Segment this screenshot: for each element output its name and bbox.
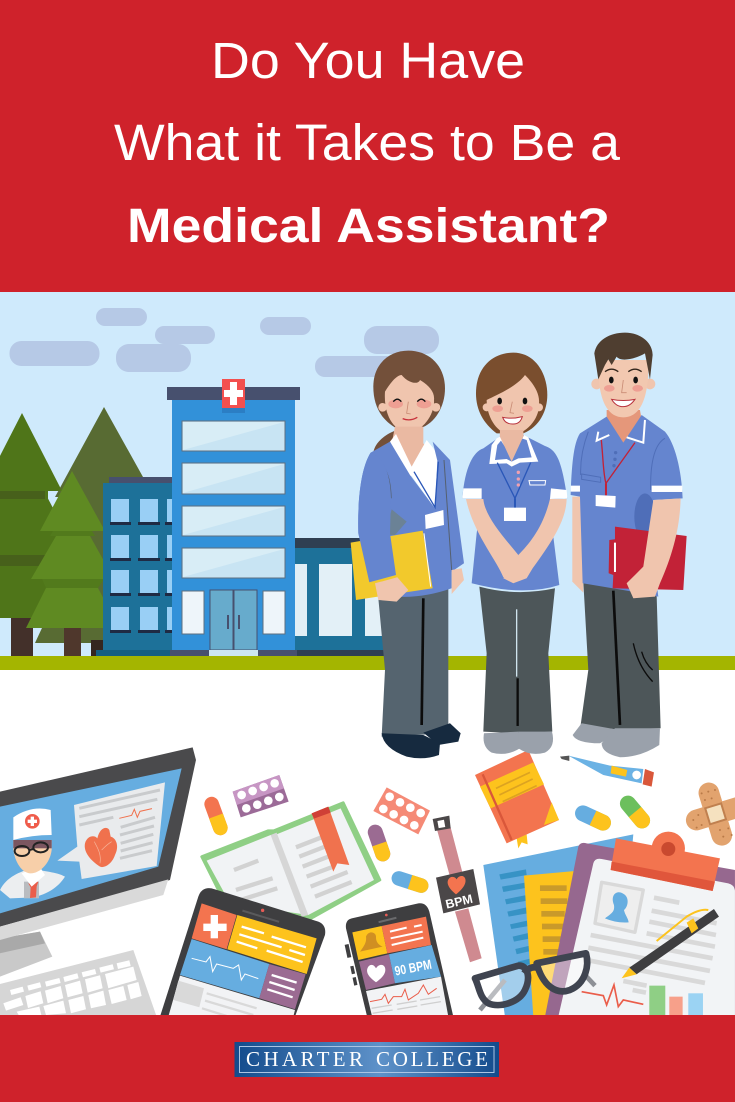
title line 1: Do You Have: [211, 32, 525, 89]
keyboard: [0, 950, 157, 1017]
arm and hand: [627, 498, 681, 598]
patient photo box: [595, 882, 643, 932]
title line 2: What it Takes to Be a: [114, 114, 621, 171]
shoes: [484, 732, 553, 754]
eyeglasses: [475, 953, 595, 1010]
documents: blue and yellow papers: [483, 834, 633, 1017]
tablet: [160, 888, 325, 1017]
pill: blue and yellow capsule lower: [390, 869, 430, 895]
sky background: [0, 292, 735, 658]
arms and hands: [466, 499, 518, 577]
collar: [597, 420, 645, 443]
nurse: woman in the middle: [462, 353, 567, 754]
shoes: [382, 723, 461, 758]
lanyard: [601, 440, 635, 483]
speech document: [57, 782, 165, 879]
open book with bookmark: [202, 803, 380, 920]
smartwatch: [433, 816, 482, 962]
icon: bandage: [683, 780, 735, 848]
nurse: man with red folder: [571, 333, 687, 757]
head: [373, 351, 445, 432]
monitor stand: [0, 932, 52, 977]
pen: [622, 909, 719, 978]
logo: Charter College: [234, 1042, 499, 1077]
doctor avatar: [0, 809, 65, 898]
title line 3: Medical Assistant?: [127, 200, 610, 253]
badge: [425, 510, 444, 529]
clipboard with patient record: [545, 832, 735, 1017]
smartwatch: BPM: [444, 892, 474, 912]
pill: green and yellow capsule: [617, 792, 653, 832]
shirt: [571, 415, 683, 597]
smartphone: [345, 903, 453, 1022]
thermometer: [560, 756, 654, 787]
sleeve stripes: [652, 486, 682, 492]
hair and face: [476, 353, 547, 435]
neck: [607, 410, 642, 445]
bar chart: [649, 986, 703, 1017]
clip: [611, 832, 720, 891]
badge: [596, 495, 616, 508]
trousers: [378, 588, 451, 737]
shirt: [462, 435, 567, 590]
pill: blue and yellow capsule upper: [572, 803, 614, 833]
icon: red cross sign: [222, 379, 245, 408]
jacket: [358, 442, 464, 597]
blister pack: coral: [373, 787, 430, 834]
nurse: woman with yellow folder: [351, 351, 464, 758]
blister pack: purple: [233, 775, 289, 817]
header band: [0, 0, 735, 292]
building: left wing: [96, 477, 174, 657]
arm and hand: [358, 453, 396, 582]
pine trees: [0, 407, 150, 657]
logo: Charter College: CHARTER: [246, 1047, 363, 1071]
building: right wing: [295, 538, 390, 657]
grass strip: [0, 656, 735, 670]
pill: purple and yellow capsule: [366, 823, 392, 863]
building: main hospital tower: [167, 379, 300, 657]
lanyard: [414, 462, 438, 507]
neck and collar: [392, 427, 440, 475]
clouds: [10, 308, 439, 377]
logo: Charter College: COLLEGE: [376, 1047, 488, 1071]
pill: orange and yellow capsule: [202, 795, 230, 837]
trousers: [479, 587, 555, 733]
monitor with doctor: [0, 747, 196, 977]
notebook: orange: [475, 750, 559, 848]
trousers: [581, 582, 661, 729]
smartphone: 90 BPM: [393, 957, 433, 979]
yellow folder: [351, 531, 433, 600]
badge: [504, 508, 526, 521]
icon: heart anatomical: [85, 828, 117, 867]
hair and face: [591, 333, 655, 417]
red folder: [609, 527, 687, 590]
shoes: [573, 723, 660, 757]
lanyard: [497, 463, 531, 498]
footer band: [0, 1015, 735, 1102]
